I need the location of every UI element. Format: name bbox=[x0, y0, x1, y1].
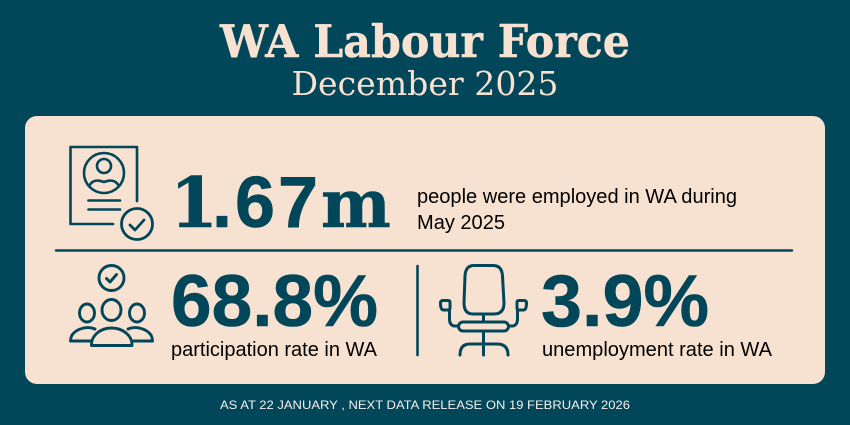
stat: employed number: 6 bbox=[235, 163, 275, 243]
text: employed description bbox=[417, 186, 737, 234]
panel: statistics bbox=[25, 116, 825, 384]
stat: participation rate: 68.8% bbox=[171, 261, 378, 342]
text: unemployment label: unemployment rate in WA bbox=[542, 339, 773, 361]
footer note: AS AT 22 JANUARY , NEXT DATA RELEASE ON 19 FEBRUARY 2026 bbox=[220, 398, 630, 412]
stat: employed number: 7 bbox=[278, 163, 318, 243]
text: employed description: May 2025 bbox=[417, 212, 505, 234]
text: employed description: people were employed in WA during bbox=[417, 186, 737, 208]
icon: group of people with check bbox=[70, 266, 152, 346]
divider bbox=[56, 249, 792, 252]
stat: employed number: m bbox=[321, 165, 391, 243]
stat: unemployment rate: 3.9% bbox=[541, 261, 709, 342]
text: participation label: participation rate in WA bbox=[171, 339, 378, 361]
stat: employed number: . bbox=[212, 163, 232, 243]
title: WA Labour Force bbox=[219, 15, 630, 68]
stat: employed number: 1 bbox=[170, 163, 218, 244]
subtitle: December 2025 bbox=[292, 64, 558, 103]
divider: vertical bbox=[416, 266, 419, 355]
icon: employment document with check bbox=[70, 147, 152, 240]
icon: office chair bbox=[440, 266, 526, 355]
